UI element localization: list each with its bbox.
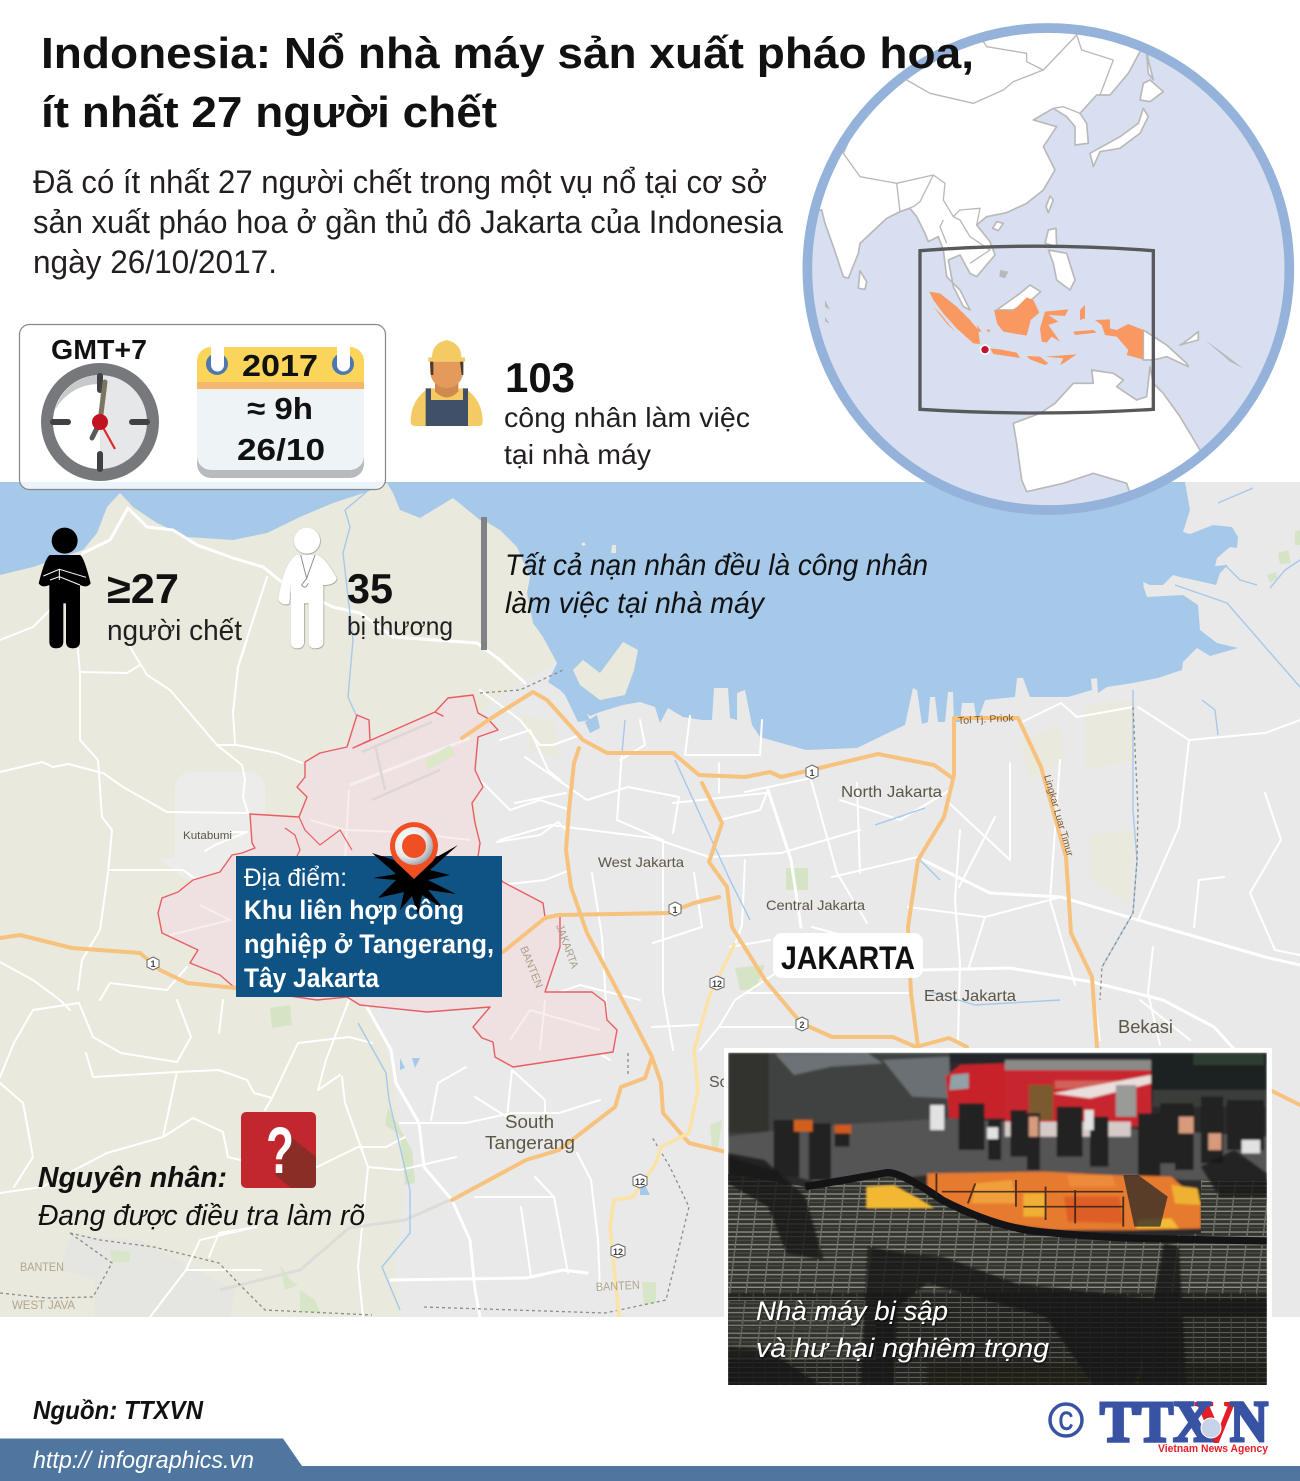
location callout: Khu liên hợp công	[244, 895, 464, 925]
intro text	[33, 164, 783, 280]
logo: TTXVN: Vietnam News Agency	[1158, 1443, 1269, 1455]
inset frame	[920, 246, 1153, 413]
map place labels: BANTEN	[595, 1278, 640, 1294]
source: Nguồn: TTXVN	[33, 1395, 204, 1425]
icon: calendar: ≈ 9h	[247, 391, 313, 426]
title: Indonesia: Nổ nhà máy sản xuất pháo hoa,	[41, 29, 974, 78]
icon: clock	[47, 369, 153, 475]
JAKARTA label: JAKARTA	[781, 940, 915, 976]
highway shields: 2	[799, 1020, 805, 1030]
Tangerang highlighted region	[158, 695, 617, 1067]
cause note	[38, 1112, 365, 1232]
Indonesia highlighted	[929, 292, 1143, 365]
location callout: Địa điểm:	[244, 864, 347, 892]
icon: deceased person	[39, 528, 91, 648]
orange toll roads	[0, 692, 1300, 1317]
injured stat: bị thương	[347, 611, 453, 641]
highway shields	[147, 765, 818, 1258]
icon: question mark	[241, 1112, 316, 1188]
injured stat	[347, 565, 453, 641]
photo caption: Nhà máy bị sập	[756, 1296, 948, 1326]
logo: TTXVN: TTX	[1100, 1389, 1213, 1454]
orange body bags	[927, 1172, 1201, 1230]
highway shields: 12	[635, 1177, 645, 1187]
rivers	[343, 483, 1300, 1310]
icon: calendar: 2017	[242, 348, 318, 383]
icon: injured person	[278, 528, 337, 648]
logo: TTXVN: N	[1230, 1389, 1268, 1454]
map place labels: Bekasi	[1118, 1017, 1173, 1037]
highway shields: 12	[613, 1247, 623, 1257]
map place labels: JAKARTA	[553, 923, 580, 971]
map place labels: East Jakarta	[924, 988, 1016, 1005]
logo: TTXVN: V	[1195, 1389, 1237, 1454]
map place labels	[12, 713, 1173, 1312]
icon: worker	[411, 340, 483, 426]
map place labels: Lingkar Luar Timur	[1041, 774, 1075, 858]
victims note	[505, 549, 928, 620]
sea	[0, 482, 1238, 750]
photo panel	[724, 1048, 1272, 1388]
map place labels: West Jakarta	[598, 854, 684, 870]
logo: copyright: C	[1058, 1406, 1074, 1436]
icon: explosion burst	[372, 826, 458, 915]
title	[41, 29, 974, 137]
icon: map pin	[390, 822, 438, 879]
title: ít nhất 27 người chết	[41, 88, 497, 137]
footer bar	[0, 1438, 1300, 1481]
Japan islands	[1090, 108, 1148, 167]
map place labels: BANTEN	[517, 945, 545, 990]
map place labels: Tol Tj. Priok	[958, 713, 1015, 727]
globe locator map	[793, 0, 1289, 520]
icon: calendar	[197, 347, 364, 478]
photo caption	[756, 1296, 1049, 1363]
Malaysia Borneo north	[997, 285, 1041, 310]
Australia	[1012, 366, 1200, 492]
victims note: Tất cả nạn nhân đều là công nhân	[505, 549, 928, 582]
workers stat: công nhân làm việc	[504, 402, 750, 433]
cause note: Nguyên nhân:	[38, 1162, 227, 1194]
map place labels: Kutabumi	[183, 830, 232, 842]
workers stat: 103	[505, 354, 575, 401]
deaths stat	[107, 565, 242, 647]
deaths stat: người chết	[107, 615, 242, 647]
charred frame mesh	[728, 1173, 1267, 1340]
footer bar: http:// infographics.vn	[33, 1447, 254, 1474]
Asia landmass	[820, 32, 1141, 311]
roads inside region	[170, 722, 600, 1050]
background map	[0, 482, 1300, 1317]
time panel	[20, 324, 386, 490]
map place labels: North Jakarta	[841, 784, 942, 801]
injured stat: 35	[347, 565, 393, 612]
logo: TTXVN	[1100, 1389, 1269, 1455]
divider bar	[481, 517, 487, 650]
map place labels: Tangerang	[485, 1133, 575, 1153]
white roads	[0, 508, 1300, 1317]
GMT label: GMT+7	[51, 334, 147, 365]
intro text: Đã có ít nhất 27 người chết trong một vụ nổ tại cơ sở	[33, 164, 767, 200]
intro text: sản xuất pháo hoa ở gần thủ đô Jakarta của Indonesia	[33, 204, 783, 240]
location callout: nghiệp ở Tangerang,	[244, 929, 494, 959]
location callout	[236, 822, 502, 997]
map place labels: So	[709, 1074, 729, 1091]
photo caption: và hư hại nghiêm trọng	[756, 1333, 1049, 1363]
deaths stat: ≥27	[107, 565, 179, 612]
highway shields: 12	[712, 979, 722, 989]
country borders	[843, 35, 1113, 263]
logo: copyright	[1050, 1404, 1082, 1436]
highway shields: 1	[672, 905, 678, 915]
highway shields: 1	[150, 959, 156, 969]
workers stat: tại nhà máy	[504, 439, 651, 470]
globe ring	[807, 28, 1289, 510]
cause note: Đang được điều tra làm rõ	[38, 1200, 365, 1232]
dashed borders	[0, 670, 1138, 1315]
crowd	[774, 1097, 1264, 1180]
map place labels: BANTEN	[20, 1260, 64, 1274]
victims note: làm việc tại nhà máy	[505, 587, 766, 620]
icon: question mark: ?	[266, 1113, 294, 1187]
workers stat	[504, 354, 750, 470]
intro text: ngày 26/10/2017.	[33, 244, 277, 280]
location callout: Tây Jakarta	[244, 963, 380, 993]
map place labels: WEST JAVA	[12, 1298, 75, 1312]
map place labels: South	[505, 1112, 554, 1132]
highway shields: 1	[809, 768, 815, 778]
Philippines	[1045, 228, 1057, 247]
icon: calendar: 26/10	[237, 432, 325, 467]
fire truck	[946, 1063, 1007, 1118]
map place labels: Central Jakarta	[766, 897, 865, 913]
location marker	[980, 344, 990, 355]
